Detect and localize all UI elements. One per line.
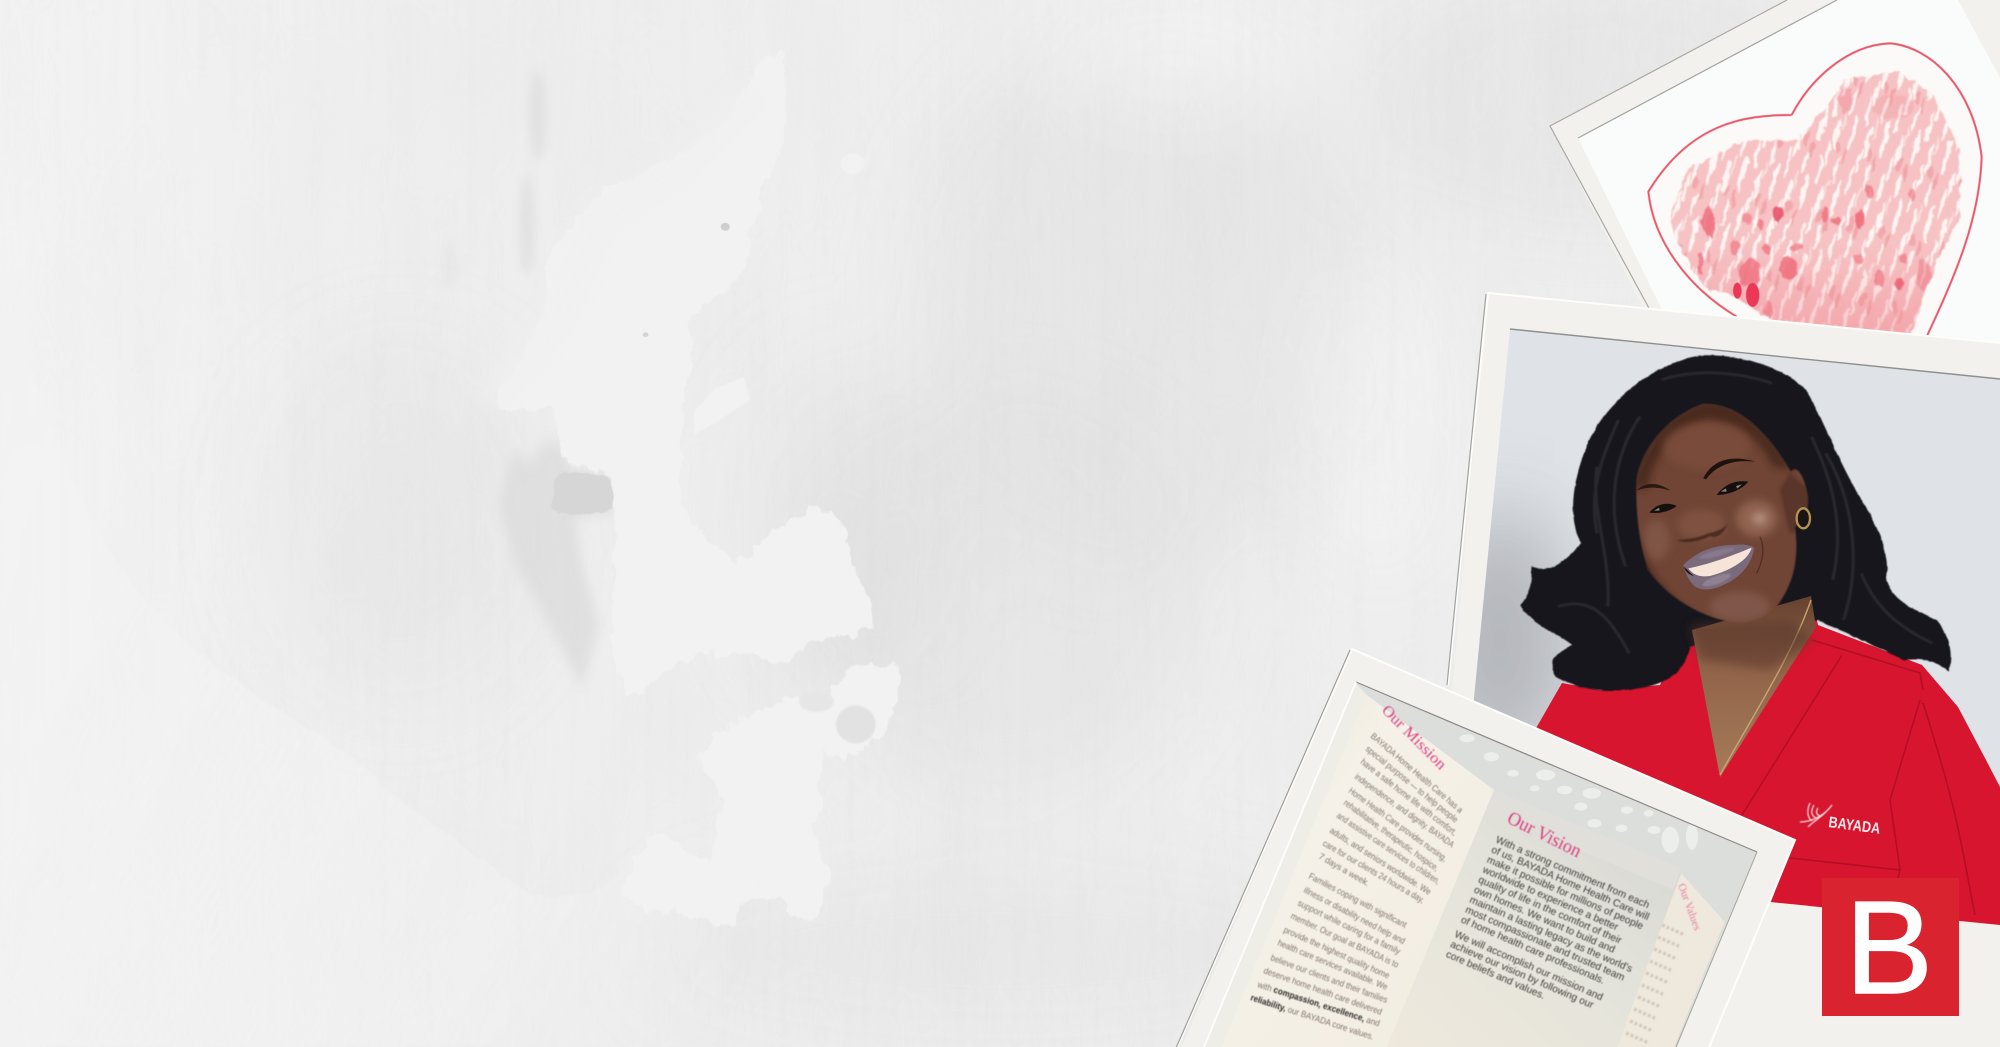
saturated drips — [1733, 283, 1759, 307]
card: photo of smiling nurse — [1446, 292, 2000, 925]
infographic canvas — [498, 0, 2000, 1047]
brochure photo backdrop — [1204, 682, 1757, 1047]
eyebrows — [1703, 459, 1755, 479]
vision leaf — [1386, 790, 1681, 1047]
heading: Our Values: Our Values — [1675, 882, 1703, 932]
brochure shapes — [1204, 682, 1757, 1047]
left eye — [1649, 504, 1677, 513]
photo frame edges — [1448, 293, 2000, 685]
lower light blotch — [615, 664, 901, 928]
families paragraph: reliability, our BAYADA core values. — [1249, 992, 1375, 1042]
vision header band — [1486, 790, 1681, 890]
mission paragraph: rehabilitative, therapeutic, hospice, — [1342, 798, 1441, 873]
values leaf text lines — [1626, 925, 1685, 1043]
soft fade along blotch left edge — [490, 90, 760, 400]
vision paragraph: achieve our vision by following our — [1448, 939, 1596, 1011]
brochure inner left highlight — [1204, 682, 1356, 1047]
lips — [1683, 545, 1754, 589]
shirt — [1530, 600, 2000, 930]
upper lip highlight — [1698, 546, 1735, 561]
vision paragraph: quality of life in the comfort of their — [1476, 875, 1624, 947]
heading: Our Vision: Our Vision — [1504, 808, 1585, 862]
heart interior tint — [1648, 43, 1982, 337]
right eye — [1717, 481, 1748, 495]
brochure text — [1249, 702, 1703, 1043]
families paragraph: Families coping with significant — [1307, 871, 1409, 930]
earring — [1797, 508, 1810, 528]
mission paragraph: BAYADA Home Health Care has a — [1369, 731, 1465, 815]
families paragraph: illness or disability need help and — [1302, 885, 1407, 946]
photo frame outer shadow — [1447, 294, 1486, 685]
shirt seams and pocket — [1742, 640, 1975, 915]
smile crease — [1757, 537, 1763, 573]
mouth corner — [1684, 567, 1694, 576]
heart card inner shadow — [1578, 0, 1837, 138]
mission paragraph — [1317, 731, 1465, 905]
neck and chest — [1692, 596, 1816, 777]
watercolour blotches in paper coordinates — [491, 50, 901, 928]
nurse portrait — [1430, 355, 2000, 930]
photo backdrop — [1440, 329, 2000, 1047]
mission paragraph: Home Health Care provides nursing, — [1347, 786, 1449, 863]
hair strands — [1558, 373, 1933, 653]
left strip beside mission leaf — [1204, 683, 1367, 1047]
vision paragraph: make it possible for millions of people — [1485, 855, 1645, 932]
lower lip highlight — [1701, 571, 1732, 589]
brochure inner right shadow — [1676, 852, 1757, 1047]
backdrop shading — [1474, 487, 1580, 728]
vision paragraph: We will accomplish our mission and — [1453, 929, 1605, 1003]
brochure frame edges — [1176, 649, 1795, 1047]
inner frame shadow — [1510, 329, 2000, 379]
mission paragraph: care for our clients 24 hours a day, — [1321, 838, 1426, 905]
lower-left lighter wash below stain arc — [0, 300, 760, 1047]
mission paragraph: have a safe home life with comfort, — [1359, 757, 1459, 838]
hatched red shading — [1670, 72, 1960, 337]
white dot pattern — [1459, 734, 1698, 853]
neck shadow — [1690, 620, 1814, 670]
main light blotch — [491, 50, 877, 701]
small light blotch — [694, 377, 750, 435]
nose — [1679, 510, 1724, 539]
teeth — [1688, 548, 1752, 576]
families paragraph — [1249, 871, 1409, 1042]
card: drawn heart — [1549, 0, 2000, 342]
heart drawing — [1648, 43, 1982, 337]
vision paragraph: worldwide to experience a better — [1480, 864, 1620, 933]
mission paragraph: independence, and dignity. BAYADA — [1353, 771, 1456, 849]
mission paragraph: adults, and seniors worldwide. We — [1328, 825, 1433, 897]
card: lower frame panel — [1700, 902, 2000, 1047]
vision paragraph: most compassionate and trusted team — [1463, 905, 1626, 984]
shirt logo: bird — [1800, 803, 1832, 827]
face shading — [1630, 400, 1813, 622]
heart card frame edges — [1550, 0, 1787, 310]
vision paragraph: With a strong commitment from each — [1494, 835, 1651, 911]
darker drips — [1697, 86, 1931, 319]
vision paragraph: core beliefs and values. — [1444, 949, 1547, 1002]
dark stain patch — [499, 440, 622, 687]
card: mission and vision brochure — [1176, 649, 1795, 1047]
brochure outer shadow — [1176, 650, 1350, 1047]
mission paragraph: 7 days a week. — [1317, 851, 1371, 888]
heart outline — [1648, 43, 1982, 337]
necklace — [1720, 600, 1811, 775]
mission leaf — [1220, 695, 1494, 1047]
mission paragraph: special purpose — to help people — [1364, 744, 1460, 825]
families paragraph: with compassion, excellence, and — [1256, 979, 1381, 1028]
face base — [1636, 404, 1808, 623]
dark tip — [551, 471, 622, 515]
photo frame — [1420, 293, 2000, 1047]
families paragraph: deserve home health care delivered — [1262, 965, 1383, 1017]
shirt logo: wordmark: BAYADA — [1827, 814, 1881, 838]
letter B: B — [1845, 874, 1933, 1021]
vision paragraph: own homes. We want to build and — [1472, 885, 1617, 956]
values leaf — [1616, 873, 1725, 1047]
vision paragraph: of home health care professionals. — [1459, 915, 1606, 987]
red square — [1822, 878, 1959, 1016]
vertical grey streak — [445, 70, 546, 290]
vision paragraph — [1443, 834, 1660, 1030]
mission paragraph: and assistive care services to children, — [1335, 810, 1442, 886]
brochure inner top shadow — [1356, 682, 1757, 852]
lower shading — [1692, 258, 1933, 334]
vision paragraph: of us, BAYADA Home Health Care will — [1489, 845, 1651, 923]
families paragraph: member. Our goal at BAYADA is to — [1289, 911, 1400, 970]
hair — [1520, 355, 1951, 690]
brochure frame — [1176, 649, 1795, 1047]
families paragraph: provide the highest quality home — [1282, 925, 1391, 981]
face — [1630, 400, 1813, 623]
heading: Our Mission: Our Mission — [1378, 702, 1450, 773]
families paragraph: health care services available. We — [1276, 938, 1389, 992]
heart card frame — [1550, 0, 2000, 400]
families paragraph: believe our clients and their families — [1269, 952, 1389, 1005]
logo: BAYADA red B block — [1822, 874, 1959, 1021]
heart card paper — [1578, 0, 2000, 360]
families paragraph: support while caring for a family — [1296, 898, 1402, 957]
vision paragraph: maintain a lasting legacy as the world's — [1468, 895, 1634, 975]
